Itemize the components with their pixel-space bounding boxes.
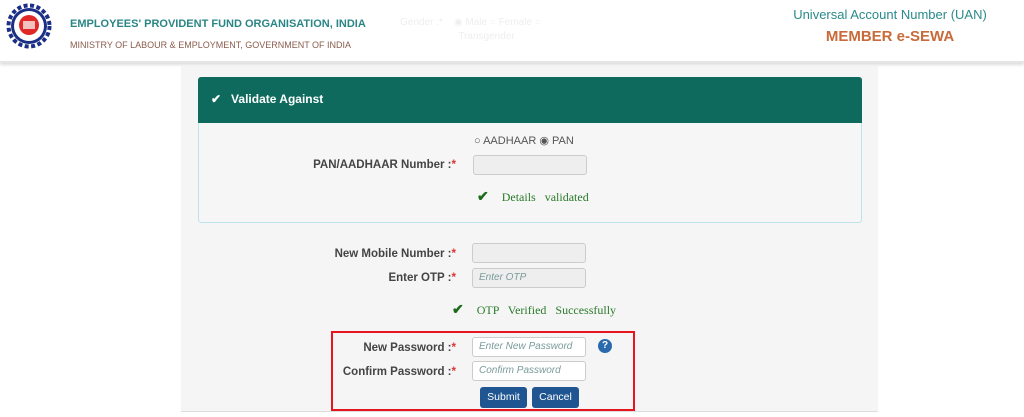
label: mobile: New Mobile Number :* (335, 248, 456, 260)
header bar (0, 0, 1024, 63)
button: cancel (532, 387, 579, 408)
subtitle: ministry: MINISTRY OF LABOUR & EMPLOYMENT, GOVERNMENT OF INDIA (70, 40, 351, 50)
faded background form text (400, 17, 541, 42)
faded background form text: Transgender (458, 31, 515, 42)
button: cancel: Cancel (539, 391, 572, 403)
status: details validated: ✔ Details validated (477, 190, 589, 205)
panel: main card (181, 66, 878, 412)
input: OTP: Enter OTP (479, 272, 526, 283)
input: OTP (472, 268, 586, 288)
faded background form text: Gender :* ◉ Male ○ Female ○ (400, 17, 541, 28)
label: new password: New Password :* (363, 342, 456, 354)
input: mobile (472, 243, 586, 263)
title: organisation name: EMPLOYEES' PROVIDENT FUND ORGANISATION, INDIA (70, 18, 366, 30)
callout: red highlight box (331, 331, 635, 411)
button: submit: Submit (487, 391, 520, 403)
title: member e-sewa: MEMBER e-SEWA (826, 28, 954, 45)
input: confirm password: Confirm Password (479, 365, 561, 376)
button: submit (480, 387, 527, 408)
input: new password: Enter New Password (479, 341, 572, 352)
label: confirm password: Confirm Password :* (343, 366, 456, 378)
label: OTP: Enter OTP :* (388, 272, 456, 284)
heading: validate against: ✔ Validate Against (211, 92, 323, 106)
title: UAN: Universal Account Number (UAN) (793, 7, 987, 22)
label: PAN/AADHAAR: PAN/AADHAAR Number :* (313, 159, 456, 171)
input: new password (472, 337, 586, 357)
input: confirm password (472, 361, 586, 381)
radio options: ○ AADHAAR ◉ PAN (474, 135, 574, 147)
icon: EPFO logo (6, 4, 52, 48)
status: OTP verified: ✔ OTP Verified Successfully (452, 303, 616, 318)
icon: help: ? (602, 340, 608, 351)
icon: help (598, 339, 612, 353)
panel header (198, 77, 862, 123)
panel: validate against (198, 77, 862, 223)
input: PAN (473, 155, 587, 175)
